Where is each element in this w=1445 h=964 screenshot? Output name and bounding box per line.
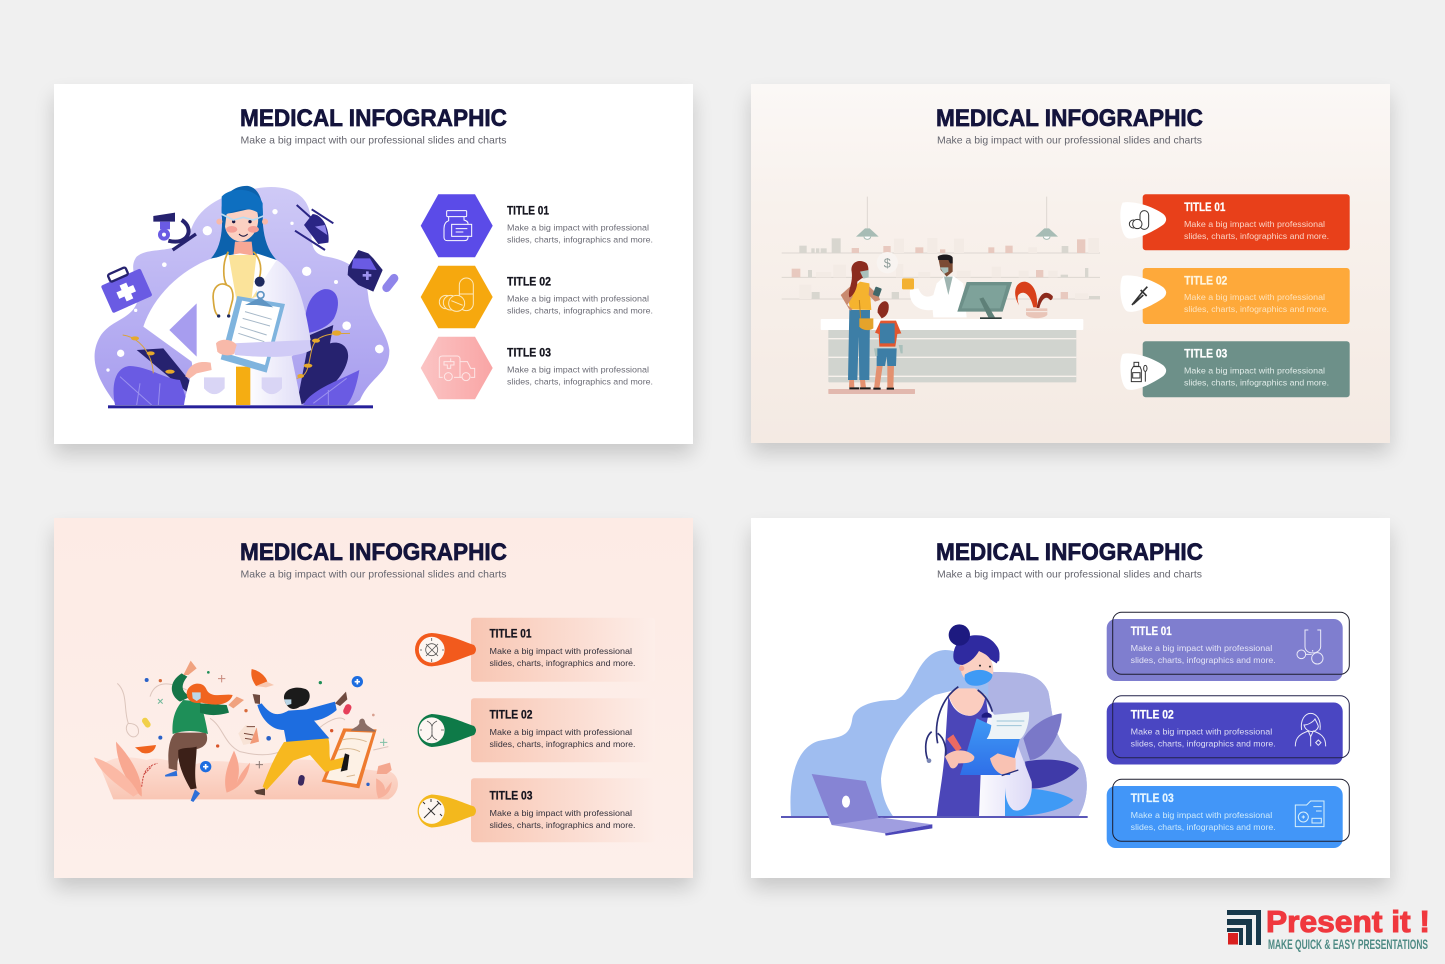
hexagon 01 with bottle icon: [421, 194, 493, 257]
card 02 indigo with doctor icon: [1107, 696, 1349, 764]
plant leaves: [94, 742, 392, 798]
logo wordmark: Present it !: [1266, 904, 1430, 939]
card 02 indigo with doctor icon: TITLE 02: [1131, 710, 1174, 722]
card 01 lavender with stethoscope icon: slides, charts, infographics and more.: [1131, 655, 1276, 665]
slide 1: hexagon layout: [54, 84, 693, 454]
slide 3 subtitle: Make a big impact with our professional slides and charts: [240, 568, 506, 580]
row 01 orange pin and text: [415, 618, 655, 682]
slide 4 subtitle: Make a big impact with our professional slides and charts: [937, 568, 1202, 580]
card 03 teal with bottle icon: [1120, 341, 1350, 397]
child customer: [873, 301, 903, 390]
card 03 blue with report icon: slides, charts, infographics and more.: [1131, 822, 1276, 832]
row 01 orange pin and text: Make a big impact with professional: [490, 646, 632, 656]
card 01 red with pills icon: [1120, 194, 1350, 250]
pharmacist: [902, 254, 967, 317]
hexagon 03 text: Make a big impact with professional: [507, 364, 649, 374]
icon: microscope: [153, 213, 196, 250]
lamp: [856, 197, 1058, 239]
icon: helicopter: [295, 205, 333, 250]
slide 2 subtitle: Make a big impact with our professional slides and charts: [937, 134, 1202, 146]
card 01 red with pills icon: Make a big impact with professional: [1184, 219, 1325, 229]
row 02 green pin and text: Make a big impact with professional: [490, 727, 632, 737]
woman in green: [165, 661, 244, 802]
card 01 lavender with stethoscope icon: [1107, 612, 1349, 681]
hexagon 03 with ambulance icon: [421, 337, 493, 399]
card 03 teal with bottle icon: slides, charts, infographics and more.: [1184, 378, 1329, 388]
illustration: nurse writing on clipboard: [781, 624, 1088, 836]
person in blue: [253, 688, 349, 795]
plant: [1015, 282, 1053, 318]
card 02 orange with dropper icon: [1120, 268, 1350, 324]
hexagon 03 text: TITLE 03: [507, 348, 551, 360]
hexagon 01 text: slides, charts, infographics and more.: [507, 234, 653, 244]
slide 2: pharmacy layout: [751, 84, 1390, 453]
slide 4: doctor with laptop layout: [751, 518, 1390, 888]
card 03 blue with report icon: Make a big impact with professional: [1131, 810, 1272, 820]
hexagon 02 text: Make a big impact with professional: [507, 294, 649, 304]
floating pills and shapes: [135, 669, 363, 786]
card 02 orange with dropper icon: Make a big impact with professional: [1184, 292, 1325, 302]
card 01 red with pills icon: slides, charts, infographics and more.: [1184, 231, 1329, 241]
hexagon 01 text: TITLE 01: [507, 206, 550, 218]
hexagon 02 text: slides, charts, infographics and more.: [507, 306, 653, 316]
card 01 lavender with stethoscope icon: Make a big impact with professional: [1131, 643, 1272, 653]
hexagon 01 text: Make a big impact with professional: [507, 222, 649, 232]
note card: [238, 725, 259, 745]
illustration: pharmacy counter: [782, 197, 1100, 394]
icon: laptop: [812, 774, 932, 836]
row 02 green pin and text: slides, charts, infographics and more.: [490, 739, 636, 749]
hexagon 03 text: [507, 348, 653, 386]
slide 1 subtitle: Make a big impact with our professional slides and charts: [240, 134, 506, 146]
slide 2 title: MEDICAL INFOGRAPHIC: [936, 105, 1203, 132]
card 03 teal with bottle icon: TITLE 03: [1184, 348, 1227, 360]
card 03 teal with bottle icon: Make a big impact with professional: [1184, 366, 1325, 376]
icon: first aid kit: [98, 262, 153, 313]
row 03 yellow pin and text: [418, 778, 655, 842]
row 02 green pin and text: [418, 698, 655, 762]
slide 1 title: MEDICAL INFOGRAPHIC: [240, 105, 507, 132]
row 03 yellow pin and text: TITLE 03: [490, 790, 532, 802]
slide 3: dancing people layout: [54, 518, 693, 888]
card 02 orange with dropper icon: TITLE 02: [1184, 276, 1227, 288]
row 03 yellow pin and text: Make a big impact with professional: [490, 808, 632, 818]
hexagon 02 with pills icon: [421, 266, 493, 328]
row 02 green pin and text: TITLE 02: [490, 710, 532, 722]
slide 3 title: MEDICAL INFOGRAPHIC: [240, 539, 507, 566]
icon: medicine bottle: [348, 250, 400, 294]
card 02 indigo with doctor icon: slides, charts, infographics and more.: [1131, 738, 1276, 748]
illustration: two people dancing: [94, 661, 398, 802]
hexagon 02 text: [507, 276, 653, 316]
card 02 orange with dropper icon: slides, charts, infographics and more.: [1184, 304, 1329, 314]
dollar bubble: $: [884, 256, 891, 270]
hexagon 03 text: slides, charts, infographics and more.: [507, 376, 653, 386]
row 03 yellow pin and text: slides, charts, infographics and more.: [490, 820, 636, 830]
dollar bubble: [877, 252, 898, 273]
leaves: [1005, 713, 1079, 817]
logo: Present it: [1227, 904, 1430, 952]
hexagon 01 text: [507, 206, 653, 244]
logo mark: [1227, 910, 1261, 945]
clipboard: [322, 719, 377, 788]
monitor: [957, 282, 1012, 319]
card 02 indigo with doctor icon: Make a big impact with professional: [1131, 726, 1272, 736]
card 03 blue with report icon: [1107, 779, 1349, 848]
row 01 orange pin and text: slides, charts, infographics and more.: [490, 658, 636, 668]
illustration: doctor with clipboard: [95, 186, 400, 408]
card 01 red with pills icon: TITLE 01: [1184, 202, 1226, 214]
slide 4 title: MEDICAL INFOGRAPHIC: [936, 539, 1203, 566]
card 01 lavender with stethoscope icon: TITLE 01: [1131, 626, 1172, 638]
card 03 blue with report icon: TITLE 03: [1131, 793, 1174, 805]
hexagon 02 text: TITLE 02: [507, 276, 551, 288]
row 01 orange pin and text: TITLE 01: [490, 628, 532, 640]
woman customer: [841, 261, 882, 389]
clipboard: [960, 712, 1029, 775]
pharmacy counter: [821, 319, 1083, 382]
